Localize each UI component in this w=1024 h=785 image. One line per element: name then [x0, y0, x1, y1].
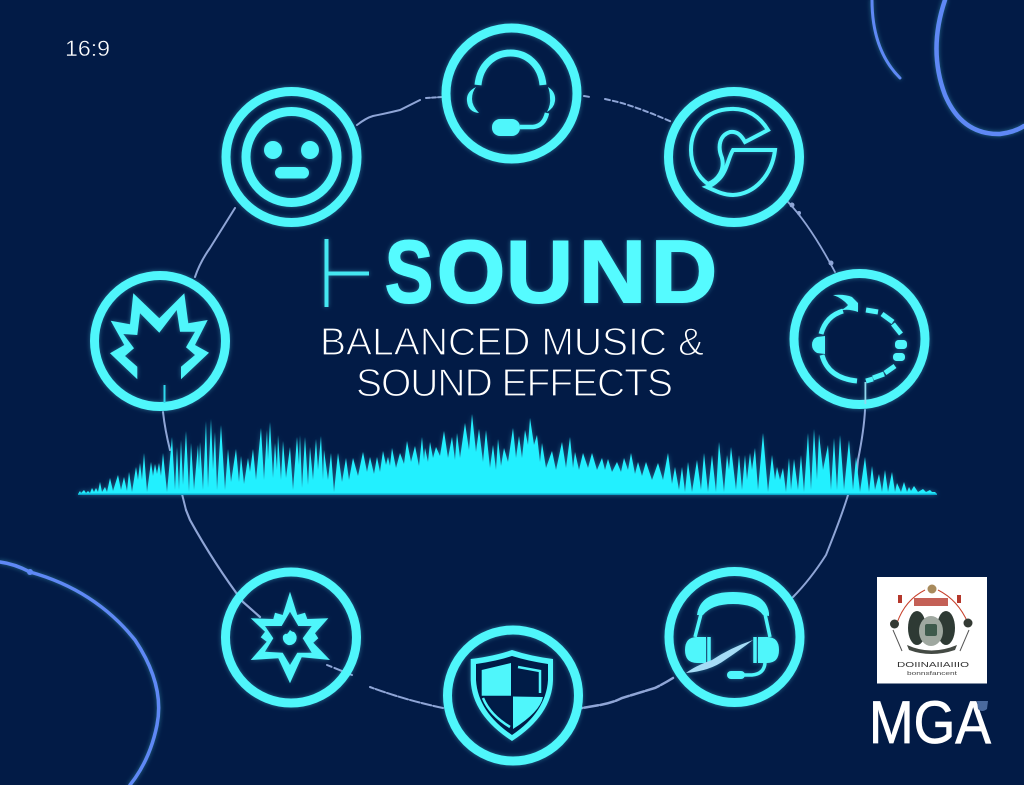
- logo: MGA: MGA: [869, 689, 991, 756]
- icon: bottom headset: [669, 572, 800, 702]
- icon: G swirl: [668, 92, 800, 222]
- audio waveform: [78, 414, 937, 495]
- connector ring: [163, 96, 865, 708]
- icon: dashed ring: [794, 274, 925, 404]
- icon: shield: [448, 630, 578, 761]
- aspect ratio label: 16:9: [65, 36, 110, 61]
- heading: SOUND: U: [506, 222, 573, 321]
- heading: SOUND: N: [579, 222, 646, 321]
- crest badge: bonnsfancent: [907, 671, 958, 677]
- subtitle line 2: SOUND EFFECTS: [356, 362, 673, 405]
- crest badge: [877, 577, 987, 684]
- icon: maple burst: [94, 276, 226, 406]
- subtitle line 1: BALANCED MUSIC &: [320, 321, 704, 364]
- heading: SOUND: S: [385, 222, 433, 321]
- icon: star: [226, 572, 356, 703]
- heading: SOUND: O: [437, 222, 505, 321]
- heading: SOUND: D: [651, 222, 717, 321]
- icon: face: [226, 92, 357, 222]
- crest badge: DOIINAIIAIIIO: [897, 662, 970, 669]
- title icon: tee bar: [324, 239, 369, 307]
- icon: top headset: [446, 28, 577, 159]
